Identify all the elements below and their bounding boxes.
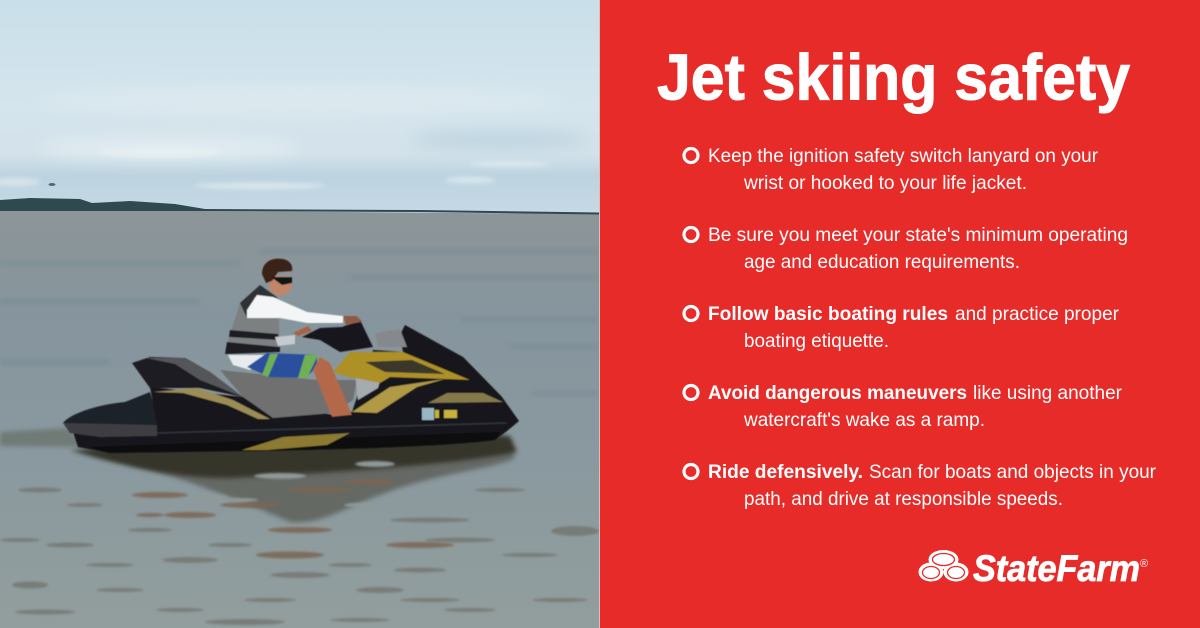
bullet 1: Keep the ignition safety switch lanyard on your [708, 145, 1098, 167]
hands [343, 316, 362, 325]
shorts white lining [228, 355, 267, 370]
bullet 4: Avoid dangerous maneuvers [708, 382, 967, 404]
bullet 4 [684, 382, 1122, 431]
bullet 2 [684, 224, 1128, 273]
registered mark: ® [1140, 558, 1148, 570]
bullet 1: wrist or hooked to your life jacket. [743, 172, 1027, 194]
bullet 2: age and education requirements. [744, 251, 1020, 273]
bullet 4: like using another [973, 382, 1122, 404]
bullet 3: boating etiquette. [744, 330, 889, 352]
shorts [247, 353, 317, 378]
photo: rider on jet ski [0, 0, 600, 628]
bumper [63, 423, 157, 437]
gold stripes [153, 388, 270, 419]
bullet 1 [684, 145, 1098, 194]
reflection [70, 435, 517, 558]
handlebars [302, 320, 373, 352]
bullet 5: Scan for boats and objects in your [869, 461, 1156, 483]
title: Jet skiing safety [657, 40, 1130, 114]
bullet 3 [684, 303, 1119, 352]
sky with clouds [0, 0, 600, 214]
windscreen [400, 325, 502, 397]
bullet 4: watercraft's wake as a ramp. [743, 409, 985, 431]
bullet 2: Be sure you meet your state's minimum operating [708, 224, 1128, 246]
divider edge of photo [599, 0, 600, 628]
registration [422, 408, 434, 420]
leg [313, 357, 352, 417]
bullet 3: Follow basic boating rules [708, 303, 948, 325]
bullet 5: path, and drive at responsible speeds. [744, 488, 1063, 510]
life vest [228, 298, 280, 348]
seat [220, 370, 357, 418]
State Farm logo [918, 548, 1148, 589]
jet ski [63, 320, 519, 453]
icon: three ovals [918, 550, 968, 582]
bullet 3: and practice proper [955, 303, 1119, 325]
bullet 5: Ride defensively. [708, 461, 863, 483]
wordmark: StateFarm [973, 548, 1140, 589]
water [0, 211, 600, 628]
ripples [4, 361, 107, 363]
white shirt [247, 295, 343, 323]
head [268, 276, 292, 296]
distant shoreline [0, 198, 600, 214]
rear seat hump [132, 357, 243, 397]
bullet list [684, 145, 1156, 510]
rider [225, 259, 362, 417]
front deck [333, 352, 473, 383]
console [375, 329, 407, 347]
icon: distant bird [48, 183, 56, 186]
rear platform [62, 392, 158, 426]
red background panel [600, 0, 1200, 628]
hull [73, 350, 519, 453]
bullet 5 [684, 461, 1156, 510]
